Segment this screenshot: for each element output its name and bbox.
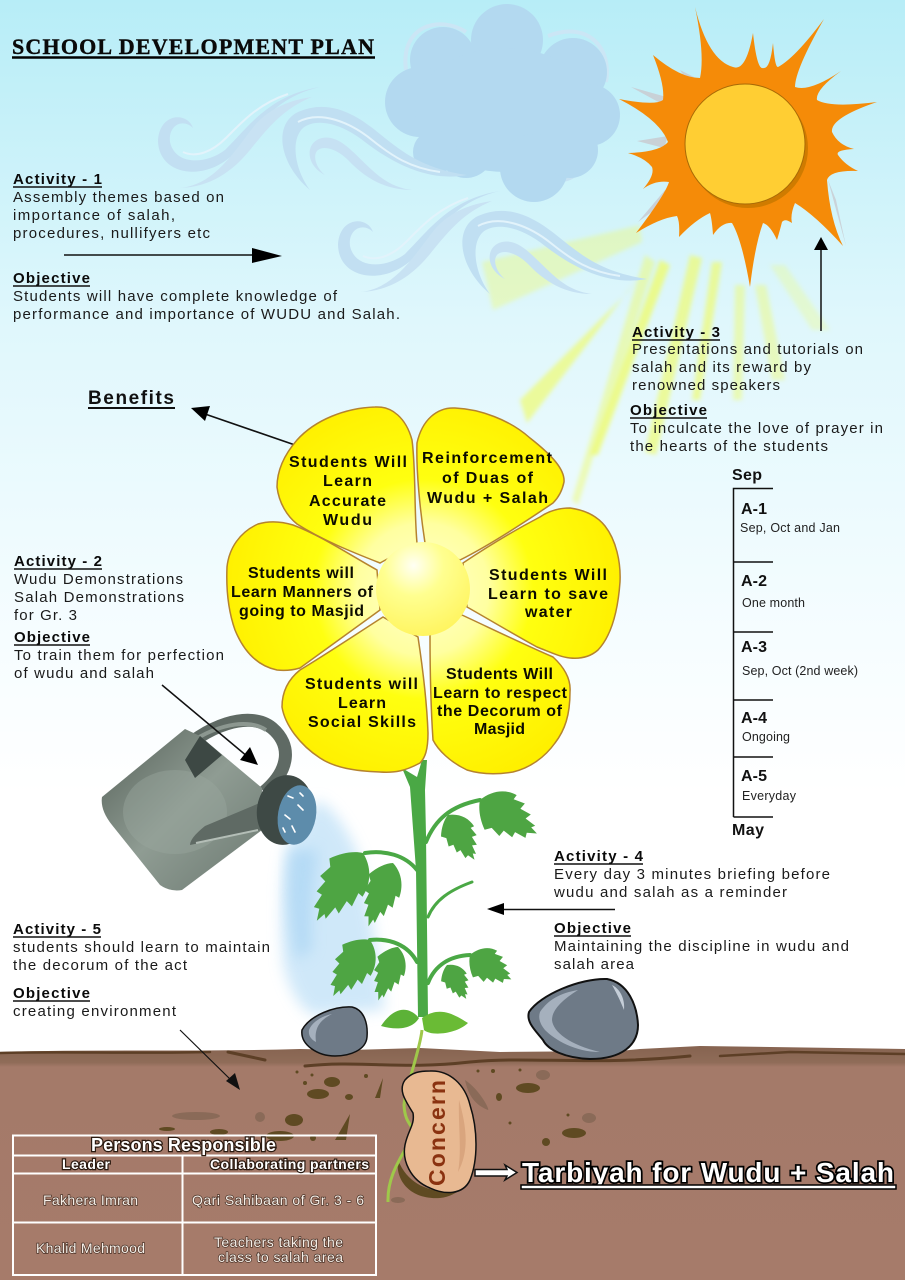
timeline: May (732, 822, 764, 839)
petal labels: Masjid (474, 721, 525, 738)
persons responsible table: Persons Responsible (91, 1135, 276, 1155)
petal labels: the Decorum of (437, 703, 563, 720)
activity 3 text: salah and its reward by (632, 359, 812, 376)
petal: respect decorum (430, 615, 570, 774)
activity 4 text: Maintaining the discipline in wudu and (554, 938, 849, 955)
petal labels: of Duas of (442, 470, 534, 487)
activity 2 text (14, 553, 224, 682)
timeline: One month (742, 596, 805, 610)
title: SCHOOL DEVELOPMENT PLAN (12, 34, 374, 59)
timeline: A-1 (741, 501, 767, 518)
soil cracks (0, 1052, 905, 1066)
persons responsible table: Collaborating partners (210, 1156, 369, 1172)
activity 1 text: performance and importance of WUDU and Salah. (13, 306, 400, 323)
activity 3 text: Presentations and tutorials on (632, 341, 863, 358)
arrow: activity 1 to wind (64, 248, 282, 263)
timeline: Sep, Oct and Jan (740, 521, 840, 535)
activity 2 text: To train them for perfection (14, 647, 224, 664)
arrow: flower to benefits (191, 406, 295, 445)
wind swirls (158, 87, 647, 294)
activity 3 text: Activity - 3 (632, 324, 720, 341)
sun spikes (619, 7, 877, 287)
activity 1 text: Activity - 1 (13, 171, 102, 188)
petal labels: Wudu (323, 512, 372, 529)
soil specks (159, 1068, 586, 1146)
activity 4 text: Objective (554, 920, 631, 937)
activity 4 text: salah area (554, 956, 635, 973)
watering can (102, 720, 321, 890)
seed label: Concern (424, 1080, 450, 1186)
sun rays (482, 225, 830, 505)
root (388, 1030, 422, 1202)
stem (402, 760, 428, 1017)
persons responsible table: Leader (62, 1156, 111, 1172)
activity 3 text (630, 324, 883, 455)
petal labels: Learn (323, 473, 372, 490)
petal: reinforcement of duas (417, 408, 564, 560)
small rock (302, 1007, 367, 1056)
petal labels: Reinforcement (422, 450, 553, 467)
petal labels: Social Skills (308, 714, 416, 731)
timeline: Ongoing (742, 730, 790, 744)
activity 1 text: Assembly themes based on (13, 189, 224, 206)
activity 2 text: Activity - 2 (14, 553, 102, 570)
seedling leaves (381, 1010, 419, 1028)
can body (102, 729, 262, 890)
timeline: Sep (732, 467, 762, 484)
activity 2 text: for Gr. 3 (14, 607, 77, 624)
petal labels (231, 450, 608, 738)
timeline: A-5 (741, 768, 767, 785)
cloud (385, 4, 620, 202)
petal labels: Accurate (309, 493, 386, 510)
petal labels: going to Masjid (239, 603, 364, 620)
arrow: activity 3 to sun (814, 237, 828, 331)
petal labels: Students Will (446, 666, 553, 683)
petal labels: Students will (305, 676, 418, 693)
activity 5 text: students should learn to maintain (13, 939, 270, 956)
timeline: Sep, Oct (2nd week) (742, 664, 858, 678)
activity 5 text: Objective (13, 985, 90, 1002)
activity 3 text: renowned speakers (632, 377, 780, 394)
petal labels: Learn (338, 695, 386, 712)
timeline: A-4 (741, 710, 767, 727)
petal labels: Students Will (489, 567, 607, 584)
branches (365, 800, 480, 983)
water stream (281, 800, 385, 1015)
petal labels: Learn to save (488, 586, 608, 603)
sun disk (688, 88, 808, 208)
activity 1 text: Objective (13, 270, 90, 287)
timeline: Everyday (742, 789, 797, 803)
activity 3 text: To inculcate the love of prayer in (630, 420, 883, 437)
timeline: A-3 (741, 639, 767, 656)
activity 2 text: of wudu and salah (14, 665, 154, 682)
petal labels: water (524, 604, 572, 621)
can handle (174, 720, 285, 792)
arrow: seed to outcome (475, 1165, 517, 1180)
activity 2 text: Objective (14, 629, 90, 646)
activity 1 text: procedures, nullifyers etc (13, 225, 210, 242)
activity 5 text: Activity - 5 (13, 921, 101, 938)
arrow: activity 2 to watering can (162, 685, 258, 765)
can lower handle (190, 802, 262, 845)
benefits heading: Benefits (88, 388, 174, 409)
activity 1 text (13, 171, 400, 323)
timeline: A-2 (741, 573, 767, 590)
activity 5 text: the decorum of the act (13, 957, 188, 974)
activity 2 text: Salah Demonstrations (14, 589, 184, 606)
persons responsible table (13, 1135, 376, 1275)
petal: social skills (282, 617, 428, 772)
arrow: activity 5 to soil (180, 1030, 240, 1090)
persons responsible table: class to salah area (218, 1249, 343, 1265)
large rock (528, 979, 638, 1059)
seed (402, 1071, 476, 1193)
petal labels: Students Will (289, 454, 407, 471)
persons responsible table: Qari Sahibaan of Gr. 3 - 6 (192, 1192, 364, 1208)
petal: save water (463, 508, 620, 658)
activity 1 text: importance of salah, (13, 207, 175, 224)
timeline (732, 467, 858, 839)
petal labels: Wudu + Salah (427, 490, 548, 507)
petal: manners of going to masjid (227, 522, 380, 670)
ground (0, 1046, 905, 1280)
sun (619, 7, 877, 287)
petal: accurate wudu (277, 407, 417, 563)
sun shadow streaks (631, 70, 846, 246)
outcome heading: Tarbiyah for Wudu + Salah (522, 1157, 894, 1188)
flower centre (376, 542, 470, 636)
can rose (251, 771, 319, 849)
persons responsible table: Khalid Mehmood (36, 1240, 145, 1256)
activity 4 text: Activity - 4 (554, 848, 644, 865)
activity 5 text (13, 921, 270, 1020)
persons responsible table: Fakhera Imran (43, 1192, 138, 1208)
leaves (297, 781, 548, 1007)
activity 4 text (553, 848, 849, 973)
activity 2 text: Wudu Demonstrations (14, 571, 183, 588)
petal labels: Students will (248, 565, 354, 582)
activity 3 text: Objective (630, 402, 707, 419)
arrow: activity 4 to plant (487, 903, 615, 915)
plant (297, 760, 548, 1202)
activity 4 text: wudu and salah as a reminder (553, 884, 787, 901)
petal labels: Learn to respect (433, 685, 568, 702)
persons responsible table: Teachers taking the (214, 1234, 343, 1250)
petal labels: Learn Manners of (231, 584, 374, 601)
activity 4 text: Every day 3 minutes briefing before (554, 866, 830, 883)
activity 3 text: the hearts of the students (630, 438, 828, 455)
flower (227, 407, 620, 774)
activity 5 text: creating environment (13, 1003, 177, 1020)
activity 1 text: Students will have complete knowledge of (13, 288, 338, 305)
